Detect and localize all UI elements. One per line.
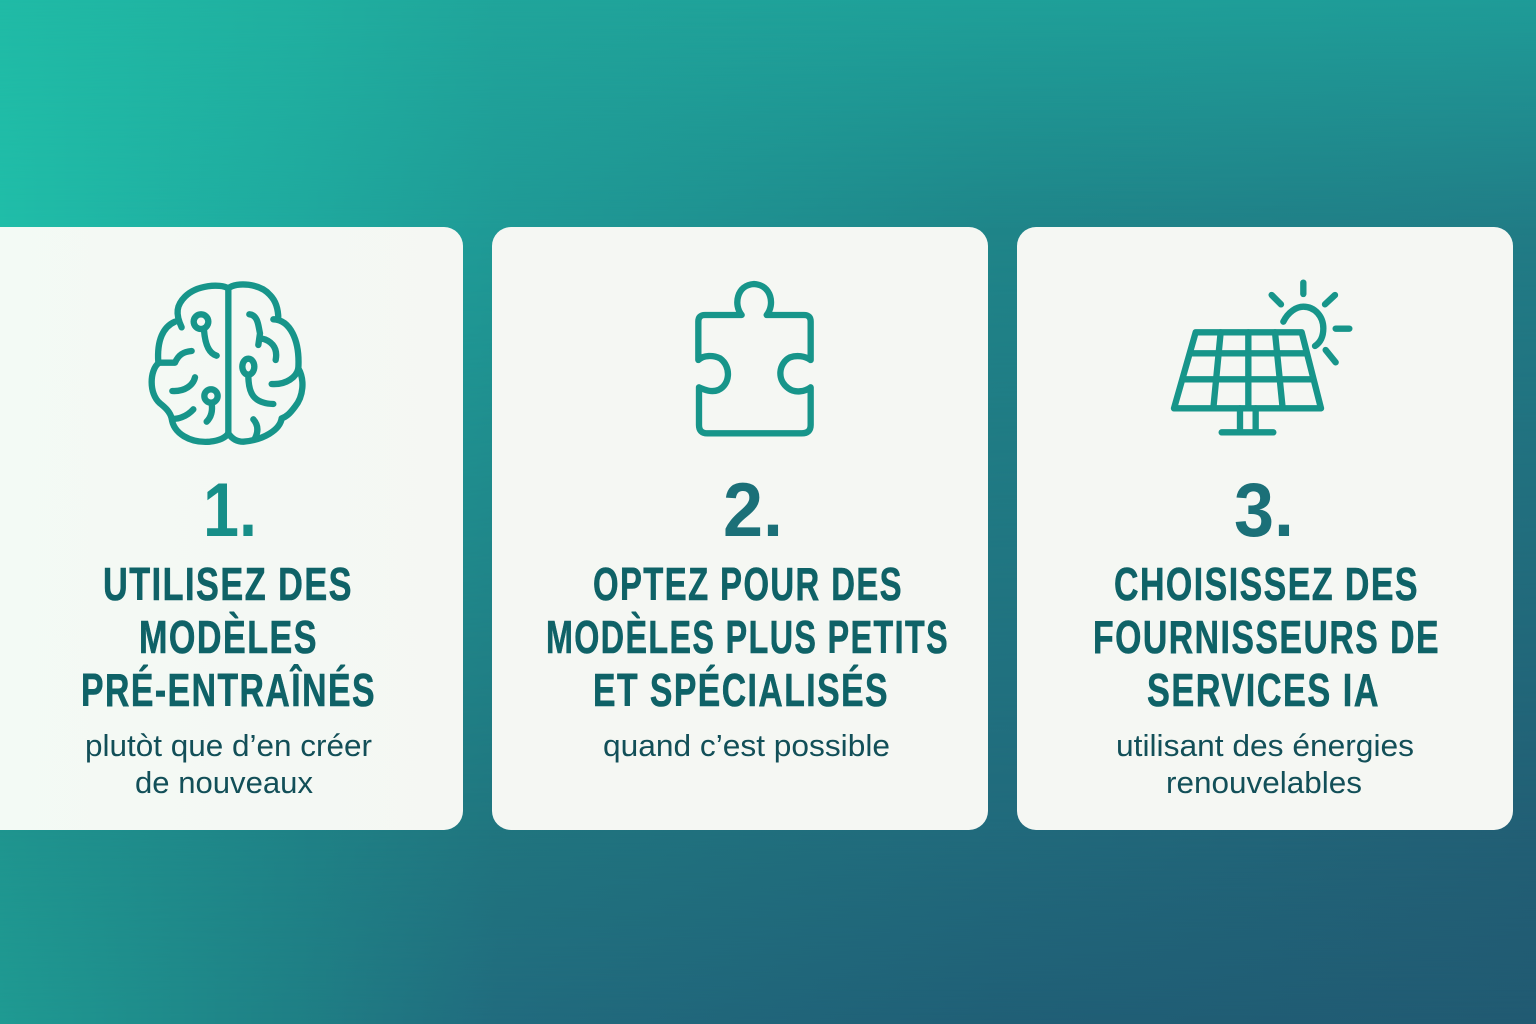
icon: puzzle piece (698, 284, 811, 433)
panel: card 3 renewable AI providers (1017, 227, 1513, 830)
heading 2 (546, 558, 949, 716)
description 3: renouvelables (1166, 765, 1362, 800)
description 2: quand c’est possible (603, 728, 890, 763)
heading 2: ET SPÉCIALISÉS (593, 664, 889, 716)
card 2 background (492, 227, 988, 830)
icon: solar panel and sun (1174, 283, 1349, 432)
panel: card 1 pre-trained models (0, 227, 463, 830)
number 1: 1. (203, 468, 257, 553)
heading 3: SERVICES IA (1147, 664, 1380, 716)
card 1 background (0, 227, 463, 830)
description 3 (1116, 728, 1414, 800)
heading 2: OPTEZ POUR DES (593, 558, 903, 610)
description 1: de nouveaux (135, 765, 313, 800)
panel: card 2 smaller specialised models (492, 227, 988, 830)
icon: brain (152, 284, 302, 442)
description 1: plutòt que d’en créer (85, 728, 372, 763)
heading 3 (1093, 558, 1440, 716)
heading 1: PRÉ-ENTRAÎNÉS (81, 664, 376, 716)
card 3 background (1017, 227, 1513, 830)
heading 3: CHOISISSEZ DES (1114, 558, 1419, 610)
heading 1: MODÈLES (139, 611, 318, 663)
number 3: 3. (1234, 468, 1294, 553)
number 2: 2. (723, 468, 783, 553)
description 3: utilisant des énergies (1116, 728, 1414, 763)
heading 2: MODÈLES PLUS PETITS (546, 611, 949, 663)
heading 1 (81, 558, 376, 716)
description 1 (85, 728, 372, 800)
heading 1: UTILISEZ DES (103, 558, 353, 610)
